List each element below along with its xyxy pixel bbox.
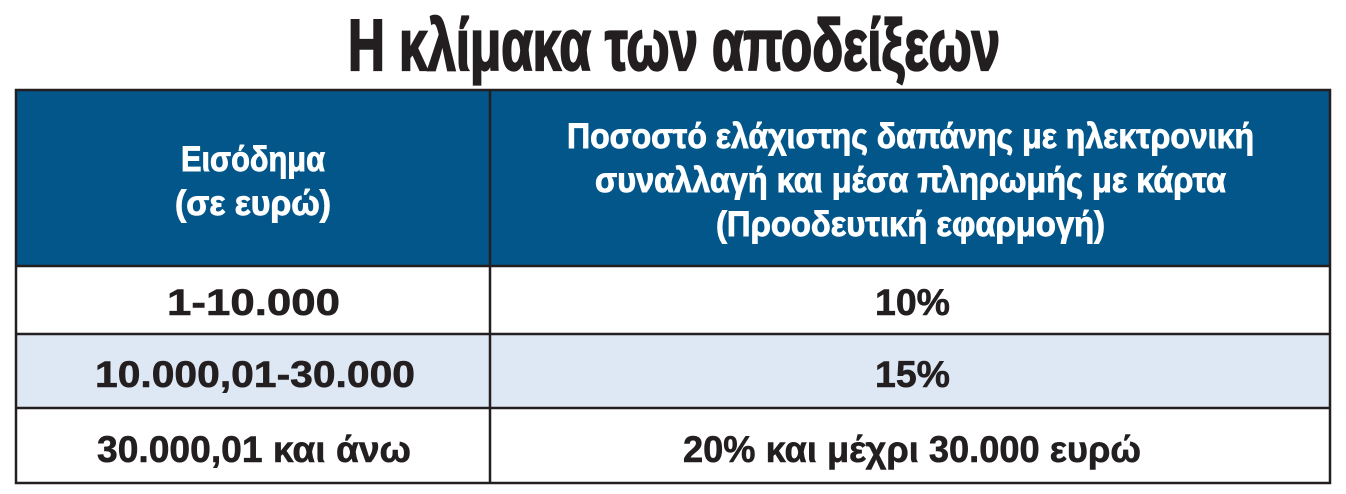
row 1: income bracket and rate: [167, 282, 950, 323]
column heading: income: Εισόδημα: [181, 140, 325, 179]
column heading: minimum spend percentage: (Προοδευτική εφαρμογή): [716, 205, 1105, 244]
column heading: income: [175, 140, 331, 223]
column heading: income: (σε ευρώ): [175, 184, 331, 223]
column heading: minimum spend percentage: Ποσοστό ελάχιστης δαπάνης με ηλεκτρονική: [567, 117, 1254, 156]
column heading: minimum spend percentage: [567, 117, 1254, 244]
row 2: income bracket and rate: 10.000,01-30.000: [95, 354, 415, 395]
column heading: minimum spend percentage: συναλλαγή και μέσα πληρωμής με κάρτα: [595, 161, 1226, 200]
row 2: income bracket and rate: [95, 354, 950, 395]
row 3: income bracket and rate: 30.000,01 και άνω: [97, 429, 411, 470]
table header background: [16, 90, 1330, 266]
row 3: income bracket and rate: [97, 429, 1141, 470]
table grid: [16, 90, 1330, 483]
title: Η κλίμακα των αποδείξεων: [348, 6, 1000, 86]
row 3: income bracket and rate: 20% και μέχρι 30.000 ευρώ: [683, 429, 1141, 470]
row 2: income bracket and rate: 15%: [875, 354, 950, 395]
row 1: income bracket and rate: 10%: [875, 282, 950, 323]
row 1: income bracket and rate: 1-10.000: [167, 282, 340, 323]
table: [16, 90, 1330, 483]
highlighted row background: [16, 334, 1330, 408]
